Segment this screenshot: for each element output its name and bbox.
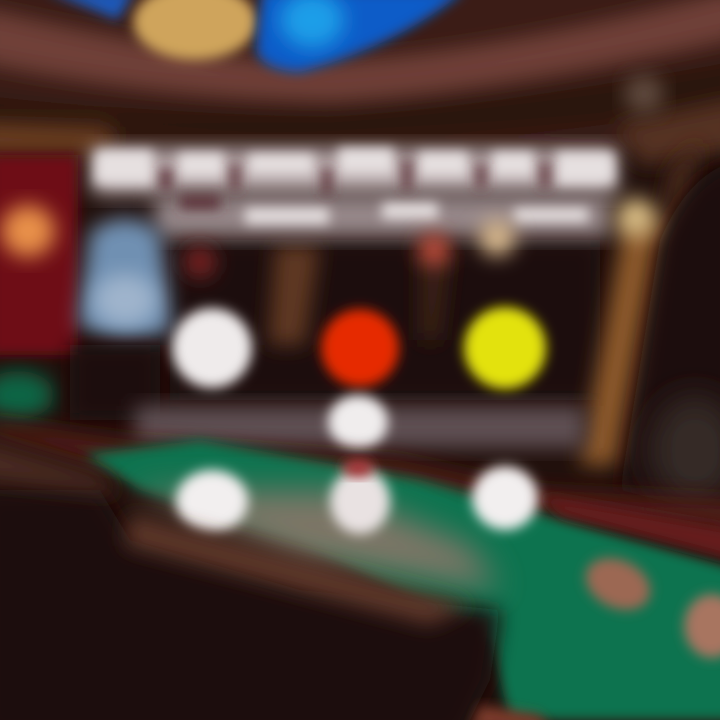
heading: blurred white sign [92,148,617,237]
ceiling [0,0,720,165]
green table edge left [0,371,54,419]
poker chip right [577,548,659,620]
yellow circle top row [464,307,546,389]
white circle top row [172,308,252,388]
red rail right [540,495,720,562]
panel: dark right alcove [620,160,720,520]
figure: blue-white person [70,218,172,420]
icon: orange glow [1,205,55,257]
lamps below sign [184,198,656,278]
dark backdrop under sign [170,240,600,400]
cyan highlight [280,0,344,48]
table felt print [130,490,500,590]
panel: red wall left [0,155,78,419]
blue light right [256,0,465,72]
distant lamp [624,74,664,114]
red marker above centre circle [342,459,374,477]
red circle top row [321,309,399,387]
white circle bottom centre [330,468,390,534]
bottom brown edge [470,705,550,720]
dark figure right [650,395,720,505]
white circle bottom left [176,470,248,532]
gold light [133,0,257,60]
brown table edge [125,515,470,625]
panel: dark foreground [0,442,512,682]
white circle middle [328,395,388,449]
panel: green table [85,440,720,720]
blue light left [45,0,135,20]
panel: grey band [135,395,585,449]
red table rail [0,410,720,530]
white circle bottom right [472,466,538,530]
wood pillars [268,140,700,470]
poker chip far right [684,594,720,658]
left rail glow [0,440,120,495]
ceiling lights [45,0,664,114]
